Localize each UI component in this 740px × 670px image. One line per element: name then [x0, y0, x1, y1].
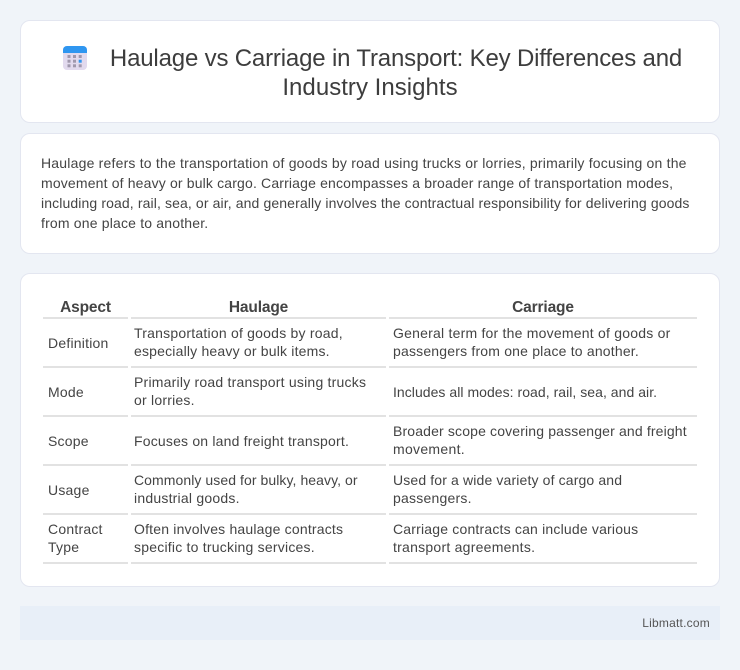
table header: Carriage — [512, 299, 574, 316]
row: usage: Commonly used for bulky, heavy, or — [134, 472, 358, 488]
row: contract type: specific to trucking services. — [134, 539, 315, 555]
panel: introduction — [20, 133, 720, 254]
title: Industry Insights — [282, 74, 458, 101]
row: scope: Broader scope covering passenger and freight — [393, 423, 687, 439]
row: contract type: Often involves haulage contracts — [134, 521, 343, 537]
row: definition: General term for the movement of goods or — [393, 325, 670, 341]
row: mode: Primarily road transport using trucks — [134, 374, 366, 390]
panel: comparison table — [20, 273, 720, 587]
row: contract type: transport agreements. — [393, 539, 535, 555]
row: scope — [48, 423, 687, 457]
row: mode: Includes all modes: road, rail, sea, and air. — [393, 384, 657, 400]
row: usage: passengers. — [393, 490, 472, 506]
row: usage: industrial goods. — [134, 490, 240, 506]
table header: Haulage — [229, 299, 288, 316]
intro text: from one place to another. — [41, 215, 208, 231]
row: usage: Used for a wide variety of cargo and — [393, 472, 622, 488]
row: usage — [48, 472, 622, 506]
footer credit: Libmatt.com — [642, 616, 710, 630]
header panel — [20, 20, 720, 123]
row: contract type — [48, 521, 638, 555]
row: definition: passengers from one place to another. — [393, 343, 639, 359]
row: definition: Transportation of goods by road, — [134, 325, 343, 341]
icon: calendar — [63, 46, 87, 70]
table — [43, 299, 697, 564]
footer bar — [20, 606, 720, 640]
intro text: Haulage refers to the transportation of goods by road using trucks or lorries, primarily focusing on the — [41, 155, 687, 171]
table header: Aspect — [60, 299, 111, 316]
title — [110, 45, 682, 101]
row: scope: movement. — [393, 441, 465, 457]
row: contract type: Carriage contracts can include various — [393, 521, 638, 537]
row: scope: Scope — [48, 433, 89, 449]
row: definition: especially heavy or bulk items. — [134, 343, 330, 359]
title: Haulage vs Carriage in Transport: Key Differences and — [110, 45, 682, 72]
row: scope: Focuses on land freight transport. — [134, 433, 349, 449]
row: contract type: Type — [48, 539, 79, 555]
row: definition — [48, 325, 670, 359]
row: mode: Mode — [48, 384, 84, 400]
intro text — [41, 155, 690, 231]
row: mode: or lorries. — [134, 392, 195, 408]
row: definition: Definition — [48, 335, 109, 351]
intro text: including road, rail, sea, or air, and generally involves the contractual responsibility for delivering goods — [41, 195, 690, 211]
intro text: movement of heavy or bulk cargo. Carriage encompasses a broader range of transportation modes, — [41, 175, 673, 191]
row: mode — [48, 374, 657, 408]
row: usage: Usage — [48, 482, 90, 498]
row: contract type: Contract — [48, 521, 103, 537]
table header — [60, 299, 574, 316]
